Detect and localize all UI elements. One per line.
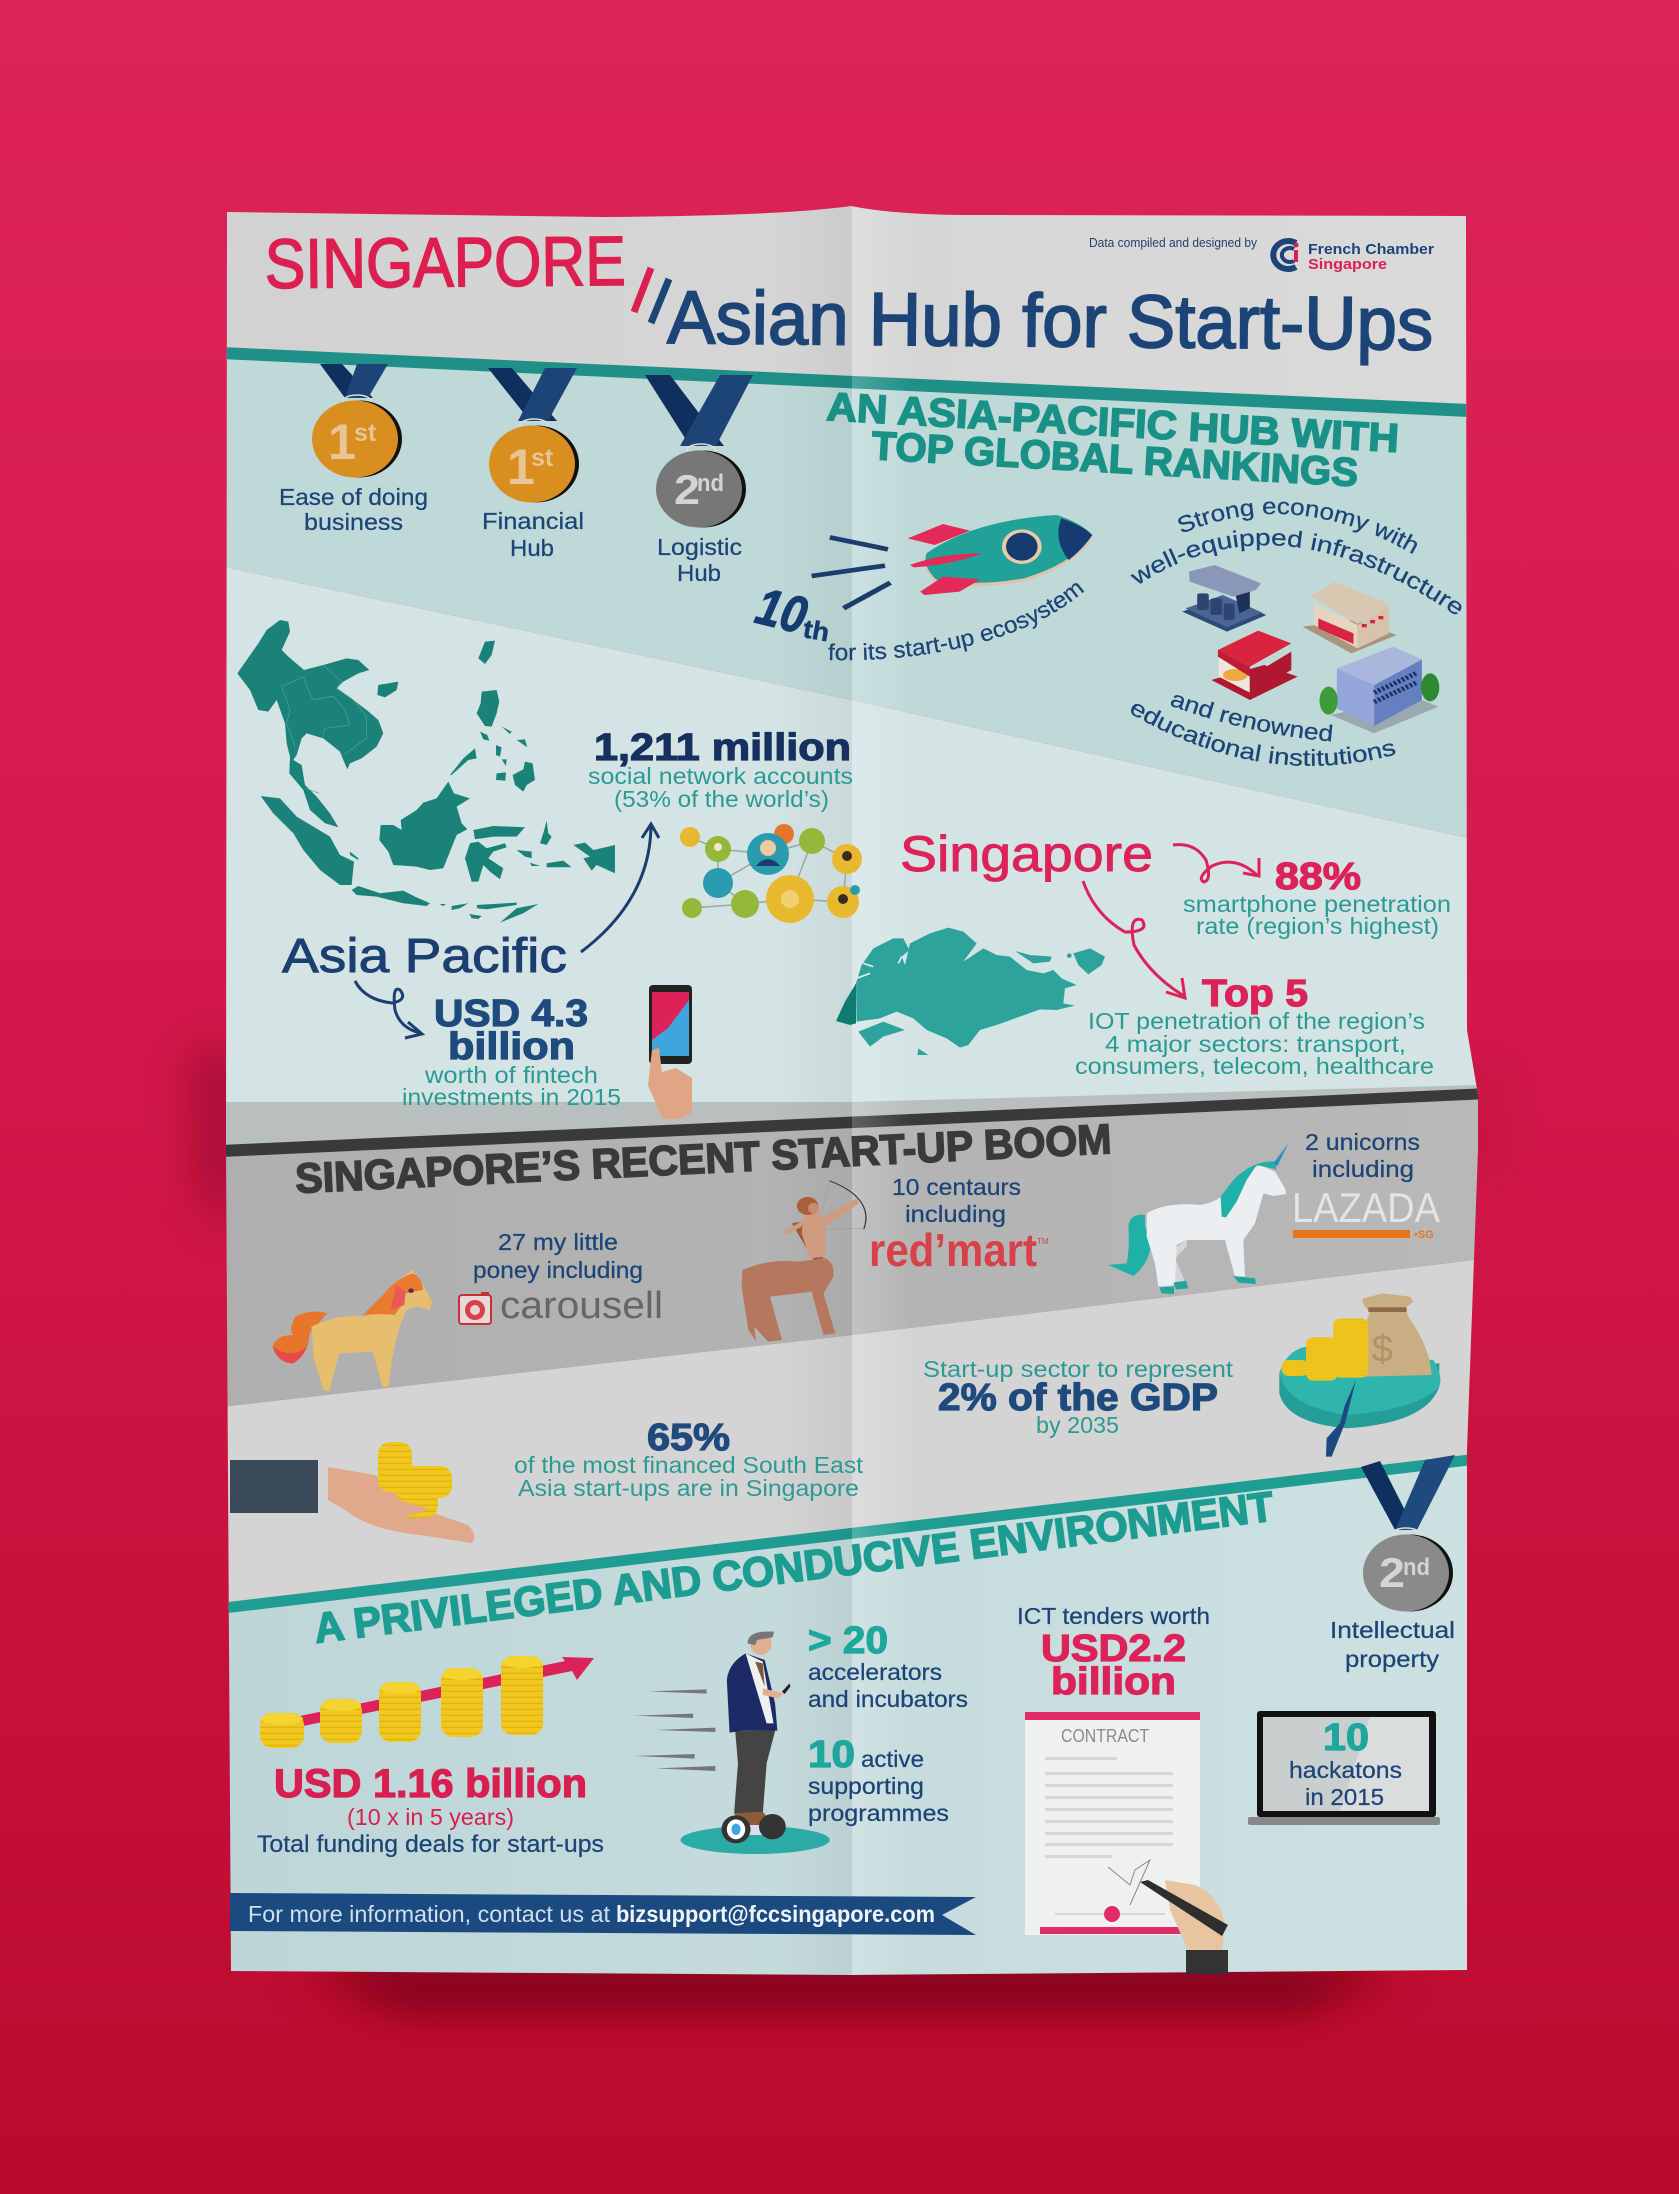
logo: Lazada: •SG [1414, 1229, 1434, 1241]
map: South East Asia [237, 620, 615, 923]
stat: 2% of the GDP: by 2035 [1036, 1412, 1119, 1438]
stat: USD 4.3 billion: worth of fintech [424, 1062, 598, 1088]
stat: USD 1.16 billion: (10 x in 5 years) [347, 1804, 514, 1830]
stat: 10 active programmes: active [861, 1746, 924, 1772]
title slashes [634, 268, 669, 323]
heading: Asia-Pacific hub [825, 385, 1400, 495]
stat: 10 hackatons [1289, 1717, 1402, 1810]
icon: laptop with hackatons [1248, 1711, 1440, 1825]
stat: 1,211 million: 1,211 million [594, 727, 851, 769]
credit: French Chamber logo: French Chamber [1308, 241, 1434, 258]
logo: Lazada: LAZADA [1292, 1184, 1440, 1231]
logo: redmart: TM [1037, 1237, 1049, 1246]
logo: redmart: red’mart [869, 1224, 1037, 1276]
teal stripe: bottom [220, 1452, 1490, 1614]
stat: USD 4.3 billion [402, 993, 621, 1110]
stat: 2% of the GDP [923, 1356, 1234, 1438]
label: Intellectual property: property [1345, 1646, 1440, 1672]
stat: Top 5: Top 5 [1202, 973, 1308, 1015]
stat: 65%: 65% [647, 1417, 730, 1459]
chart: social network nodes [680, 824, 862, 923]
icon: phone with finger [648, 985, 692, 1119]
panel: start-up boom band [220, 1090, 1490, 1407]
stat: 10 hackatons: 10 [1323, 1717, 1369, 1759]
stat: 1,211 million: (53% of the world’s) [614, 786, 829, 812]
panel: Asia Pacific and Singapore band [220, 566, 1490, 1150]
medal: logistic hub [645, 375, 753, 528]
stat: USD 1.16 billion: Total funding deals for start-ups [257, 1831, 604, 1858]
stat: USD 4.3 billion: USD 4.3 [434, 993, 588, 1035]
icon: red shop [1211, 631, 1298, 700]
icon: man on hoverboard [635, 1631, 830, 1854]
credit: French Chamber logo: Data compiled and designed by [1089, 236, 1258, 250]
icon: pie with coins and money bag: $ [1372, 1328, 1393, 1371]
dark stripe: start-up boom [220, 1088, 1490, 1157]
stat: 65%: Asia start-ups are in Singapore [518, 1475, 859, 1501]
icon: bank building [1182, 565, 1266, 632]
title: SINGAPORE: SINGAPORE [264, 222, 626, 303]
heading: privileged and conducive environment: A PRIVILEGED AND CONDUCIVE ENVIRONMENT [311, 1482, 1277, 1652]
label: 27 my little poney [473, 1229, 643, 1283]
medal: logistic hub: nd [697, 470, 724, 497]
icon: signed contract [1025, 1712, 1200, 1935]
panel: header band [220, 200, 1490, 420]
medal: intellectual property: 2 [1379, 1549, 1405, 1596]
icon: school building with trees [1319, 647, 1439, 733]
label: Financial Hub: Financial [482, 508, 584, 534]
label: 2 unicorns: 2 unicorns [1305, 1129, 1420, 1155]
stat: Top 5: consumers, telecom, healthcare [1075, 1053, 1434, 1079]
label: Ease of doing business: Ease of doing [279, 484, 428, 510]
heading: Singapore: Singapore [900, 826, 1153, 882]
arrow: Singapore to 88% [1173, 845, 1259, 882]
heading: recent start-up boom: SINGAPORE’S RECENT START-UP BOOM [294, 1115, 1112, 1202]
label: Financial Hub: Hub [510, 535, 554, 561]
stat: USD 4.3 billion: billion [448, 1026, 575, 1068]
map: Singapore island [836, 928, 1105, 1055]
medal: intellectual property [1361, 1455, 1455, 1612]
footer ribbon [230, 1893, 976, 1935]
stat: 65% [514, 1417, 864, 1501]
heading: Asia Pacific: Asia Pacific [282, 930, 567, 983]
panel: rankings band [220, 352, 1490, 843]
stat: 10 hackatons: in 2015 [1305, 1784, 1384, 1810]
label: 10th for its start-up ecosystem: for its start-up ecosystem [828, 583, 1084, 660]
stat: 65%: of the most financed South East [514, 1452, 864, 1478]
medal: financial hub [488, 368, 579, 502]
stat: USD 1.16 billion: USD 1.16 billion [274, 1762, 587, 1806]
stat: 10 active programmes: 10 [808, 1734, 855, 1776]
icon: CCI logo [1273, 241, 1298, 269]
medal: financial hub: st [531, 444, 554, 472]
icon: signed contract: CONTRACT [1061, 1726, 1149, 1746]
stat: 88% [1183, 856, 1451, 939]
icon: pie with coins and money bag [1279, 1293, 1440, 1457]
stat: 10 active programmes: programmes [808, 1800, 949, 1826]
curved label: educational institutions: and renowned [1170, 695, 1332, 742]
curved label: strong economy: Strong economy with [1178, 502, 1417, 554]
label: Ease of doing business: business [304, 509, 403, 535]
stat: Top 5: 4 major sectors: transport, [1105, 1031, 1406, 1057]
stat: Top 5 [1075, 973, 1434, 1079]
footer ribbon: For more information, contact us at [248, 1901, 611, 1927]
icon: hand with pen [1140, 1880, 1228, 1974]
paper shadow [190, 1050, 1495, 2010]
stat: ICT tenders USD2.2 billion [1017, 1603, 1210, 1703]
medal: ease of doing business: 1 [328, 414, 356, 470]
logo: carousell: carousell [500, 1285, 663, 1327]
icon: rocket [812, 515, 1092, 608]
icon: pony [273, 1270, 432, 1392]
paper poster [220, 200, 1490, 1990]
stat: more than 20 accelerators: and incubators [808, 1686, 968, 1712]
crease shading below the fold [220, 1085, 1480, 1150]
stat: Top 5: IOT penetration of the region’s [1088, 1008, 1425, 1034]
stat: 10 hackatons: hackatons [1289, 1757, 1402, 1783]
stat: 88%: smartphone penetration [1183, 891, 1451, 917]
label: Financial Hub [482, 508, 584, 561]
panel: financing band [220, 1258, 1490, 1610]
stat: 10 active programmes: supporting [808, 1773, 924, 1799]
medal: intellectual property: nd [1403, 1554, 1430, 1581]
medal: ease of doing business [312, 364, 402, 478]
stat: 1,211 million: social network accounts [588, 763, 853, 789]
label: Logistic Hub: Hub [677, 560, 721, 586]
heading: Asia-Pacific hub: AN ASIA-PACIFIC HUB WITH [825, 385, 1400, 461]
credit: French Chamber logo [1089, 236, 1434, 273]
heading: Asia-Pacific hub: TOP GLOBAL RANKINGS [870, 424, 1359, 495]
label: 10th for its start-up ecosystem: th [801, 613, 832, 647]
label: 2 unicorns [1305, 1129, 1420, 1182]
arrow: Asia Pacific to social accounts [581, 824, 659, 952]
icon: beige shop [1302, 582, 1397, 653]
stat: 1,211 million [588, 727, 853, 812]
medal: financial hub: 1 [507, 439, 535, 495]
label: 27 my little poney: poney including [473, 1257, 643, 1283]
stat: ICT tenders USD2.2 billion: USD2.2 [1041, 1628, 1186, 1670]
fold shading [831, 206, 852, 1975]
label: Intellectual property [1330, 1617, 1455, 1672]
icon: unicorn [1108, 1143, 1288, 1294]
stat: more than 20 accelerators: > 20 [808, 1620, 888, 1662]
stat: ICT tenders USD2.2 billion: billion [1051, 1661, 1176, 1703]
title: Asian Hub for Start-Ups: Asian Hub for Start-Ups [667, 275, 1434, 366]
teal stripe: top [220, 347, 1490, 418]
stat: ICT tenders USD2.2 billion: ICT tenders worth [1017, 1603, 1210, 1629]
icon: hand holding coins [230, 1442, 474, 1543]
chart: rising coin stacks [260, 1656, 594, 1748]
stat: 88%: rate (region’s highest) [1196, 913, 1439, 939]
label: 10 centaurs: including [905, 1201, 1006, 1227]
medal: logistic hub: 2 [674, 466, 700, 513]
stat: USD 4.3 billion: investments in 2015 [402, 1084, 621, 1110]
stat: 10 active programmes [808, 1734, 949, 1826]
label: Ease of doing business [279, 484, 428, 535]
icon: centaur [742, 1181, 866, 1342]
panel: conducive environment band [220, 1452, 1490, 1990]
label: 2 unicorns: including [1312, 1156, 1414, 1182]
stat: 2% of the GDP: 2% of the GDP [938, 1377, 1218, 1419]
medal: ease of doing business: st [354, 419, 377, 447]
arrow: Singapore to Top 5 [1083, 881, 1185, 998]
label: Logistic Hub [657, 534, 742, 586]
credit: French Chamber logo: Singapore [1308, 256, 1387, 273]
label: 27 my little poney: 27 my little [498, 1229, 618, 1255]
stat: USD 1.16 billion [257, 1762, 604, 1858]
label: Logistic Hub: Logistic [657, 534, 742, 560]
stat: more than 20 accelerators: accelerators [808, 1659, 942, 1685]
curved label: educational institutions: educational institutions [1130, 704, 1396, 766]
arrow: Asia Pacific to USD 4.3 [355, 981, 422, 1038]
stat: 2% of the GDP: Start-up sector to represent [923, 1356, 1234, 1382]
stat: 88%: 88% [1275, 856, 1361, 898]
label: 10 centaurs: 10 centaurs [892, 1174, 1021, 1200]
stat: more than 20 accelerators [808, 1620, 968, 1712]
label: 10th for its start-up ecosystem: 10 [750, 577, 813, 646]
curved label: strong economy: well-equipped infrastructure [1130, 530, 1462, 614]
label: Intellectual property: Intellectual [1330, 1617, 1455, 1643]
footer ribbon: bizsupport@fccsingapore.com [616, 1901, 935, 1927]
label: 10 centaurs [892, 1174, 1021, 1227]
